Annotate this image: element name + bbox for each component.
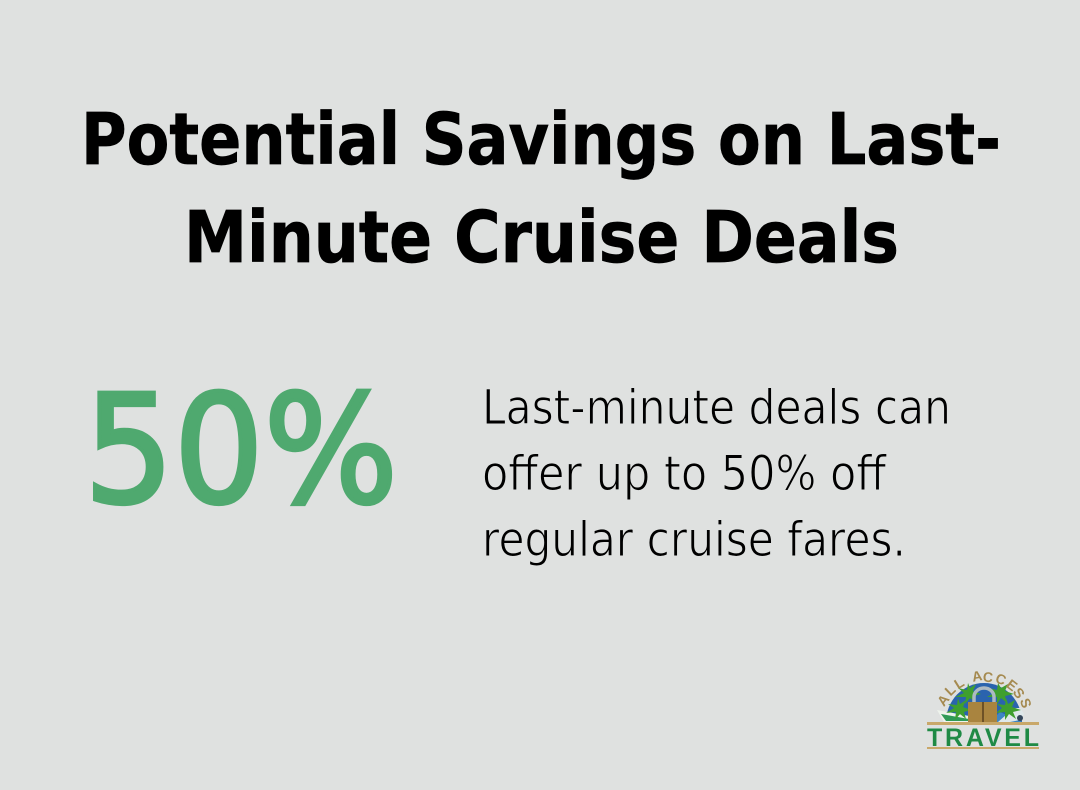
title: Minute Cruise Deals — [184, 196, 899, 279]
logo arc lettering: L — [951, 674, 967, 692]
logo arc lettering: E — [1003, 676, 1021, 694]
logo arc lettering: A — [971, 667, 983, 685]
big statistic: 50%: 50% — [84, 364, 398, 538]
logo: All Access Travel — [927, 667, 1039, 752]
logo arc lettering: C — [982, 669, 994, 685]
logo boat left — [937, 710, 969, 722]
logo wordmark: TRAVEL — [927, 724, 1039, 752]
title — [81, 98, 1001, 279]
logo arc lettering — [934, 667, 1035, 710]
logo arc lettering: S — [1010, 685, 1028, 701]
logo rules — [927, 722, 1039, 725]
logo palm trees — [946, 683, 1021, 720]
logo arc lettering: C — [993, 670, 1009, 688]
logo globe — [946, 683, 1022, 722]
logo padlock — [974, 688, 994, 702]
logo arc lettering: S — [1017, 696, 1035, 710]
logo boat right — [998, 708, 1024, 722]
description text — [482, 380, 951, 568]
description text: Last-minute deals can — [482, 380, 951, 436]
logo arc lettering: L — [941, 681, 959, 699]
logo arc lettering: A — [934, 691, 952, 709]
description text: regular cruise fares. — [482, 512, 906, 568]
description text: offer up to 50% off — [482, 446, 887, 502]
